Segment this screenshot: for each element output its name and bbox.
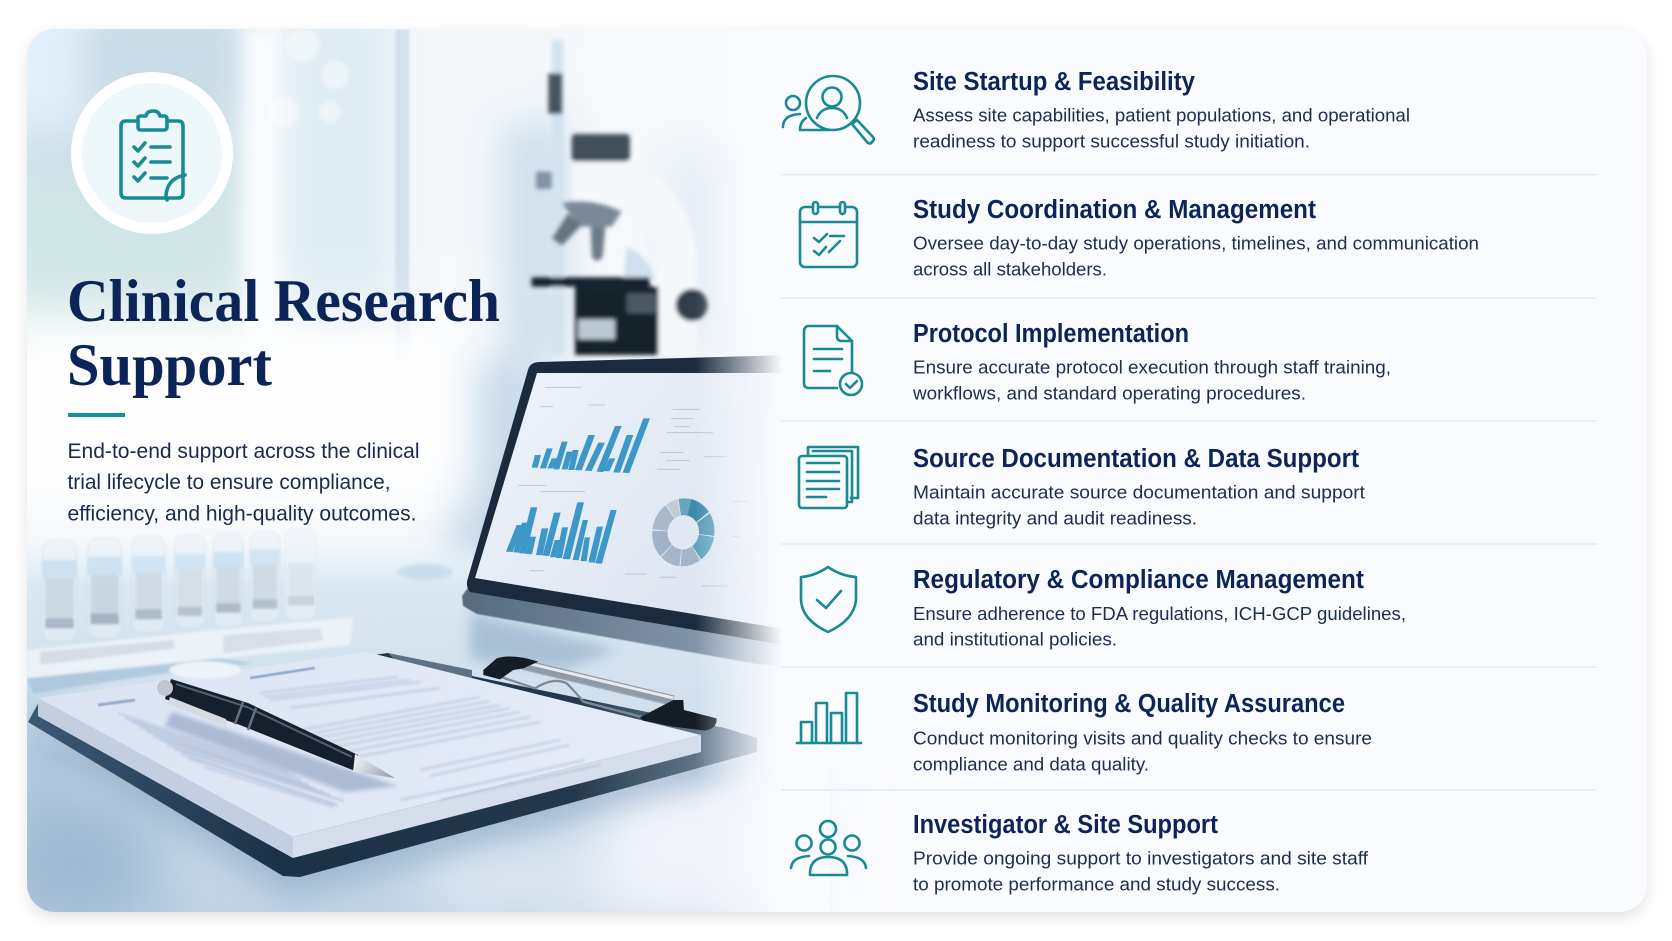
item: protocol implementation: Ensure accurate protocol execution through staff training, [913, 356, 1391, 378]
intro paragraph: efficiency, and high-quality outcomes. [68, 502, 416, 526]
icon: document with check badge [804, 326, 862, 395]
icon: group of people [791, 821, 866, 875]
title: Support [67, 332, 272, 398]
item: site startup and feasibility: Assess site capabilities, patient populations, and operational [913, 104, 1410, 126]
item: site startup and feasibility [783, 68, 1410, 152]
icon: stacked documents [799, 447, 858, 508]
item: regulatory and compliance management: Ensure adherence to FDA regulations, ICH-GCP guidelines, [913, 603, 1406, 624]
item: source documentation and data support: Source Documentation & Data Support [913, 445, 1359, 473]
badge: clipboard checklist icon [71, 72, 233, 234]
intro paragraph: trial lifecycle to ensure compliance, [68, 471, 390, 494]
icon: bar chart [797, 693, 861, 743]
item: investigator and site support: Provide ongoing support to investigators and site staff [913, 848, 1369, 868]
clip mechanism [483, 656, 717, 731]
item: study monitoring and quality assurance [797, 690, 1372, 774]
item: protocol implementation: Protocol Implementation [913, 320, 1189, 348]
item: regulatory and compliance management: Regulatory & Compliance Management [913, 566, 1364, 594]
laptop with dashboard [462, 355, 790, 666]
icon: shield with check [801, 567, 856, 632]
paper text lines [118, 677, 600, 807]
table surface [27, 559, 764, 912]
item: source documentation and data support: data integrity and audit readiness. [913, 508, 1197, 528]
right edge fade of the photo [698, 293, 820, 912]
item: site startup and feasibility: readiness to support successful study initiation. [913, 130, 1310, 152]
pen [157, 679, 398, 792]
intro paragraph: End-to-end support across the clinical [68, 440, 420, 463]
item: regulatory and compliance management [801, 566, 1406, 650]
item: source documentation and data support [799, 445, 1366, 528]
item: site startup and feasibility: Site Startup & Feasibility [913, 68, 1196, 96]
icon: calendar with checks [800, 202, 857, 267]
test tubes in rack [27, 530, 353, 693]
item: protocol implementation [804, 320, 1391, 404]
icon: magnifier over people [783, 76, 874, 144]
item: investigator and site support: Investigator & Site Support [913, 811, 1218, 839]
dashboard donut chart [652, 498, 714, 566]
teal accent rule [68, 413, 125, 417]
dashboard bar charts [506, 387, 748, 586]
item: source documentation and data support: Maintain accurate source documentation and support [913, 482, 1366, 502]
blurred lab background [27, 29, 728, 568]
item: regulatory and compliance management: and institutional policies. [913, 628, 1117, 650]
item: investigator and site support [791, 811, 1369, 894]
item: study coordination and management: across all stakeholders. [913, 258, 1107, 280]
item: study monitoring and quality assurance: compliance and data quality. [913, 754, 1149, 774]
title [67, 268, 500, 398]
hero photo: laboratory scene [27, 29, 779, 912]
item: study coordination and management: Oversee day-to-day study operations, timelines, and communication [913, 232, 1479, 254]
microscope [532, 40, 708, 355]
item: investigator and site support: to promote performance and study success. [913, 874, 1280, 894]
item: study monitoring and quality assurance: Conduct monitoring visits and quality checks to ensure [913, 728, 1372, 748]
intro paragraph [68, 440, 420, 526]
title: Clinical Research [67, 268, 500, 334]
clipboard with paper stack [28, 652, 757, 898]
item: study coordination and management: Study Coordination & Management [913, 196, 1316, 224]
white text veil [0, 315, 480, 515]
item: protocol implementation: workflows, and standard operating procedures. [912, 382, 1306, 404]
item: study monitoring and quality assurance: Study Monitoring & Quality Assurance [913, 690, 1345, 718]
item: study coordination and management [800, 196, 1479, 280]
